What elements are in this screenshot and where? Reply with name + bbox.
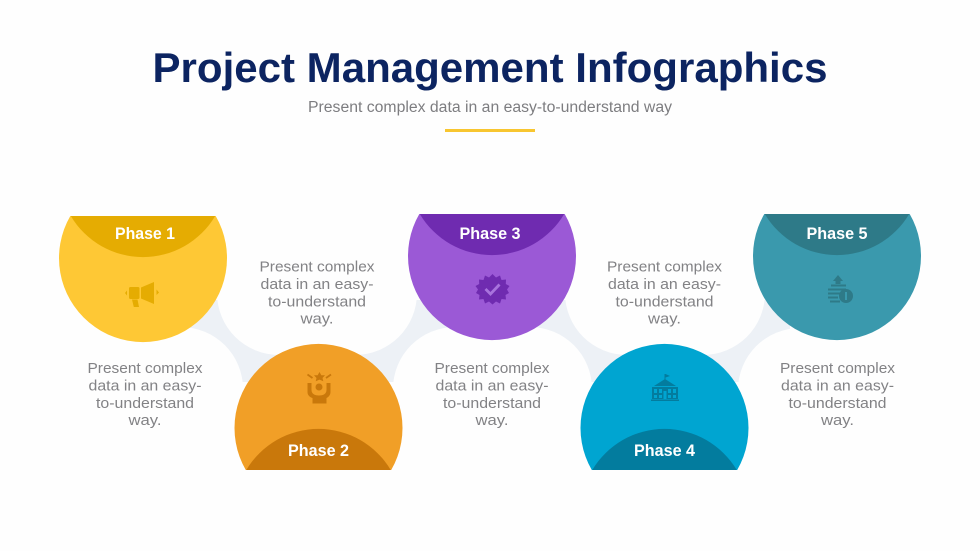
text block: phase 1 description: way. [127,412,162,429]
phase 5 label: Phase 5 [806,224,868,243]
text block: phase 1 description: Present complex [88,360,203,377]
panel: phase 2 [235,344,403,470]
panel: phase 1 [59,216,227,342]
text block: phase 2 description [260,258,375,328]
phase 4 cap [592,429,737,470]
panel: phase 5 [753,214,921,340]
phase 3 label: Phase 3 [460,224,520,243]
text block: phase 2 description: Present complex [260,258,375,276]
text block: phase 5 description: to-understand [788,395,886,412]
text block: phase 3 description: to-understand [443,395,541,412]
text block: phase 5 description: way. [820,412,854,429]
text block: phase 3 description: way. [474,412,508,429]
icon: school building [651,374,679,401]
text block: phase 4 description: Present complex [607,258,723,276]
title: Project Management Infographics [152,44,828,91]
phase 3 circle [408,214,576,340]
title underline [445,129,535,132]
panel: phase 3 [408,214,576,340]
text block: phase 3 description [434,360,550,429]
text block: phase 2 description: to-understand [268,294,366,310]
text block: phase 2 description: way. [299,310,334,328]
phase 2 cap [246,429,391,470]
text block: phase 1 description: data in an easy- [88,378,202,394]
text block: phase 4 description: to-understand [616,294,714,310]
phase 2 label: Phase 2 [288,441,349,460]
panel: phase 4 [580,344,749,470]
icon: raised arms with star [308,372,331,404]
connector wave [45,195,938,488]
phase 2 circle [235,344,403,470]
phase 4 label: Phase 4 [634,441,696,460]
phase 3 cap [420,214,564,255]
text block: phase 5 description: data in an easy- [781,378,894,394]
text block: phase 4 description [607,258,723,328]
text block: phase 1 description: to-understand [96,395,194,412]
phase 1 label: Phase 1 [115,224,175,243]
text block: phase 5 description: Present complex [780,360,896,377]
phase 5 circle [753,214,921,340]
text block: phase 3 description: Present complex [434,360,550,377]
text block: phase 4 description: data in an easy- [608,276,721,293]
icon: verified badge [476,274,510,304]
text block: phase 1 description [88,360,203,429]
text block: phase 4 description: way. [647,310,681,328]
text block: phase 5 description [780,360,896,429]
phase 5 cap [765,214,909,255]
phase 1 circle [59,216,227,342]
text block: phase 3 description: data in an easy- [436,378,548,394]
icon: megaphone [125,282,159,307]
text block: phase 2 description: data in an easy- [260,276,374,293]
icon: coins and arrow [828,275,853,303]
phase 4 circle [580,344,749,470]
phase 1 cap [71,216,215,257]
subtitle: Present complex data in an easy-to-understand way [308,99,672,116]
